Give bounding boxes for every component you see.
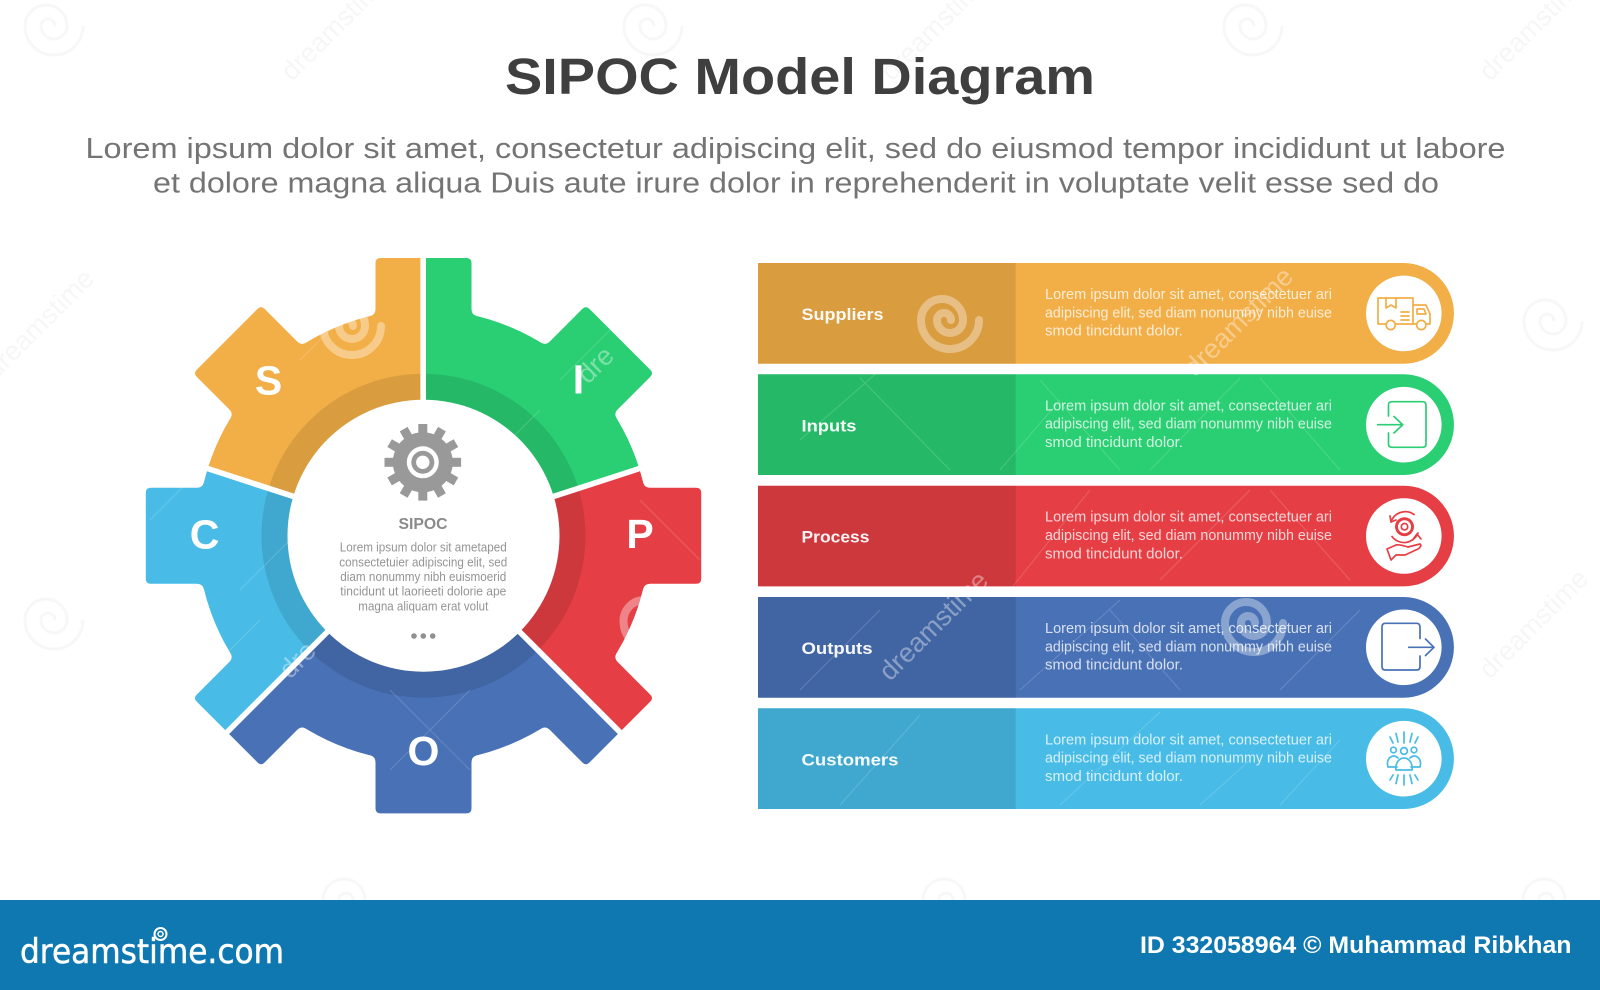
gear diagram: dre [571,340,620,389]
icon: exit arrow [1366,610,1442,685]
description: Lorem ipsum dolor sit amet, consectetuer ari [1045,732,1332,748]
watermark overlay [800,261,1360,805]
center text: consectetuier adipiscing elit, sed [339,555,507,569]
gear segment: S suppliers [195,258,420,494]
subtitle text: et dolore magna aliqua Duis aute irure dolor in reprehenderit in voluptate velit esse sed do [153,168,1439,200]
description: adipiscing elit, sed diam nonummy nibh euise [1045,528,1332,544]
center text: tincidunt ut laorieeti dolorie ape [340,585,506,599]
label: Outputs [802,639,872,658]
text: dreamstime [1473,563,1594,684]
gear segment: O outputs [229,634,618,814]
description: Lorem ipsum dolor sit amet, consectetuer ari [1045,287,1332,303]
center text [339,541,507,613]
icon: delivery truck [1366,276,1442,351]
description [1045,732,1332,785]
band: outputs [758,597,1454,698]
description: adipiscing elit, sed diam nonummy nibh euise [1045,639,1332,655]
dots [411,633,436,639]
gear segment: P process [522,471,702,730]
description: adipiscing elit, sed diam nonummy nibh euise [1045,305,1332,321]
description [1045,510,1332,562]
description: smod tincidunt dolor. [1045,658,1183,674]
icon: gear on hand [1366,498,1442,574]
label: Suppliers [802,305,884,324]
band: suppliers [758,263,1454,364]
watermark overlay: dreamstime [873,565,994,686]
gear diagram [138,235,709,813]
icon: customers group [1366,721,1442,796]
letter I: I [573,356,584,402]
center circle [288,400,560,672]
gear segment: C customers [146,471,326,730]
gear diagram: dre [273,635,322,684]
letter S: S [255,358,282,404]
center heading: SIPOC [398,516,448,533]
label: Process [802,528,870,547]
description [1045,287,1332,340]
letter O: O [408,728,439,774]
footer bar [0,900,1600,990]
description: Lorem ipsum dolor sit amet, consectetuer ari [1045,510,1332,526]
band: inputs [758,374,1454,475]
description: smod tincidunt dolor. [1045,324,1183,340]
description [1045,621,1332,674]
description: smod tincidunt dolor. [1045,546,1183,562]
letter P: P [626,511,654,557]
letter C: C [190,512,219,558]
band: customers [758,708,1454,809]
footer credit: ID 332058964 © Muhammad Ribkhan [1140,932,1572,959]
subtitle text [86,133,1506,200]
description: smod tincidunt dolor. [1045,435,1183,451]
description: Lorem ipsum dolor sit amet, consectetuer ari [1045,621,1332,637]
icon: enter arrow [1366,387,1442,463]
subtitle text: Lorem ipsum dolor sit amet, consectetur adipiscing elit, sed do eiusmod tempor incididunt ut labore [86,133,1506,165]
band: process [758,486,1454,586]
center text: Lorem ipsum dolor sit ametaped [340,541,507,555]
description: smod tincidunt dolor. [1045,769,1183,785]
gear segment: I inputs [426,258,652,494]
label: Inputs [802,416,856,435]
title: SIPOC Model Diagram [505,48,1095,105]
watermark overlay: dreamstime [1178,261,1299,382]
label: Customers [802,750,898,769]
center text: magna aliquam erat volut [358,599,489,613]
footer logo: dreamstime.com [20,932,284,972]
description: adipiscing elit, sed diam nonummy nibh euise [1045,751,1332,767]
description [1045,398,1332,451]
icon: center gear [384,424,461,501]
description: Lorem ipsum dolor sit amet, consectetuer ari [1045,398,1332,414]
description: adipiscing elit, sed diam nonummy nibh euise [1045,417,1332,433]
center text: diam nonummy nibh euismoerid [340,570,506,584]
